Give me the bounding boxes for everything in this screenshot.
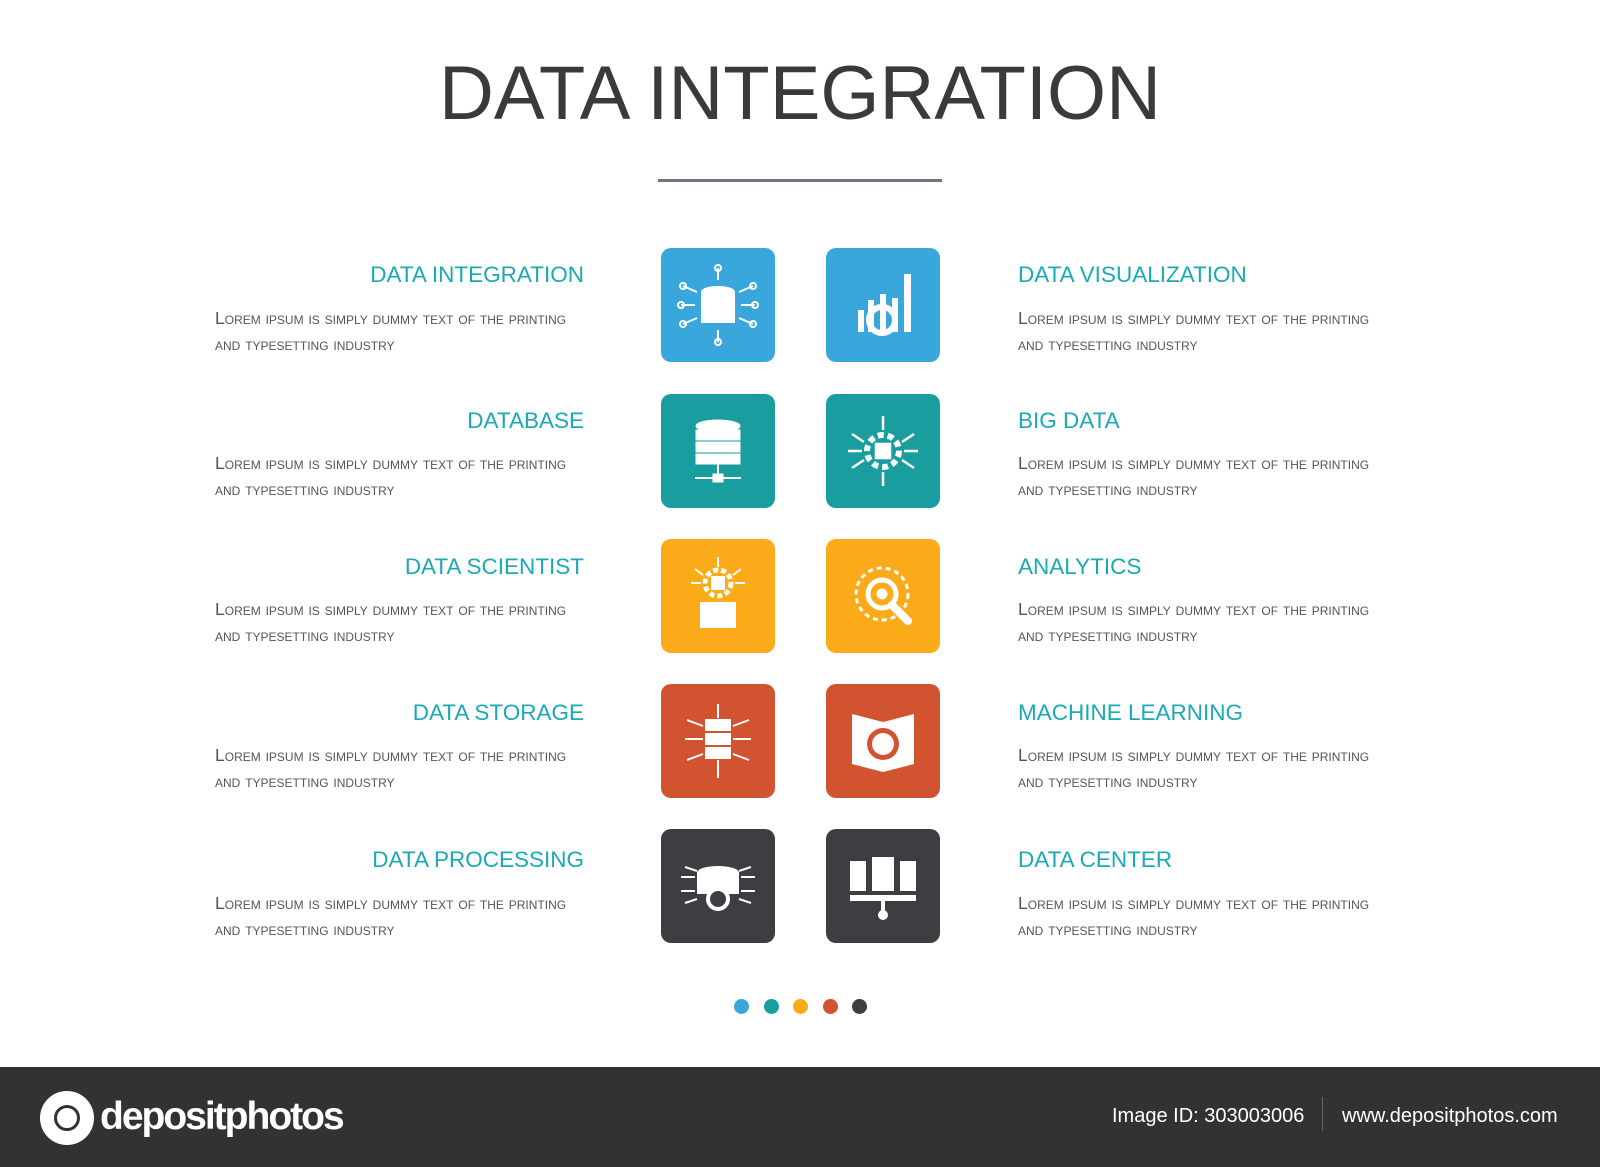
right text 2 [1018,453,1369,499]
right heading 1: DATA VISUALIZATION [1018,262,1247,287]
left text 1: and typesetting industry [215,334,395,354]
icon: machine learning [826,684,940,798]
right text 5 [1018,893,1369,939]
icon: data scientist [661,539,775,653]
left text 5: Lorem ipsum is simply dummy text of the printing [215,893,566,913]
footer bar [0,1067,1600,1167]
right heading 5: DATA CENTER [1018,847,1172,872]
right text 2: and typesetting industry [1018,479,1198,499]
left text 3: and typesetting industry [215,625,395,645]
icon: data processing [661,829,775,943]
right text 4: and typesetting industry [1018,771,1198,791]
left text 1: Lorem ipsum is simply dummy text of the printing [215,308,566,328]
right heading 4: MACHINE LEARNING [1018,700,1243,725]
footer image id: Image ID: 303003006 [1112,1105,1304,1127]
left heading 5: DATA PROCESSING [372,847,584,872]
right text 4 [1018,745,1369,791]
pagination dots [734,999,867,1014]
right heading 2: BIG DATA [1018,408,1120,433]
icon: data storage [661,684,775,798]
left heading 1: DATA INTEGRATION [370,262,584,287]
left heading 2: DATABASE [467,408,584,433]
right text 1: and typesetting industry [1018,334,1198,354]
right heading 3: ANALYTICS [1018,554,1141,579]
left heading 3: DATA SCIENTIST [405,554,584,579]
right text 5: Lorem ipsum is simply dummy text of the printing [1018,893,1369,913]
left text 2 [215,453,566,499]
left text 5 [215,893,566,939]
icon: analytics [826,539,940,653]
left text 3 [215,599,566,645]
icon: database [661,394,775,508]
divider line [658,179,942,182]
footer url: www.depositphotos.com [1342,1105,1558,1127]
left text 3: Lorem ipsum is simply dummy text of the printing [215,599,566,619]
right text 3 [1018,599,1369,645]
title: DATA INTEGRATION [439,51,1161,136]
left text 5: and typesetting industry [215,919,395,939]
right text 3: and typesetting industry [1018,625,1198,645]
icon: data integration [661,248,775,362]
left text 2: and typesetting industry [215,479,395,499]
footer logo: depositphotos [100,1095,343,1138]
right text 4: Lorem ipsum is simply dummy text of the printing [1018,745,1369,765]
left text 2: Lorem ipsum is simply dummy text of the printing [215,453,566,473]
left text 4: and typesetting industry [215,771,395,791]
left text 4 [215,745,566,791]
left text 4: Lorem ipsum is simply dummy text of the printing [215,745,566,765]
right text 5: and typesetting industry [1018,919,1198,939]
icon: data center [826,829,940,943]
right text 1: Lorem ipsum is simply dummy text of the printing [1018,308,1369,328]
left heading 4: DATA STORAGE [413,700,584,725]
icon: big data [826,394,940,508]
left text 1 [215,308,566,354]
footer logo [40,1091,344,1145]
right text 3: Lorem ipsum is simply dummy text of the printing [1018,599,1369,619]
right text 2: Lorem ipsum is simply dummy text of the printing [1018,453,1369,473]
right text 1 [1018,308,1369,354]
icon: data visualization [826,248,940,362]
